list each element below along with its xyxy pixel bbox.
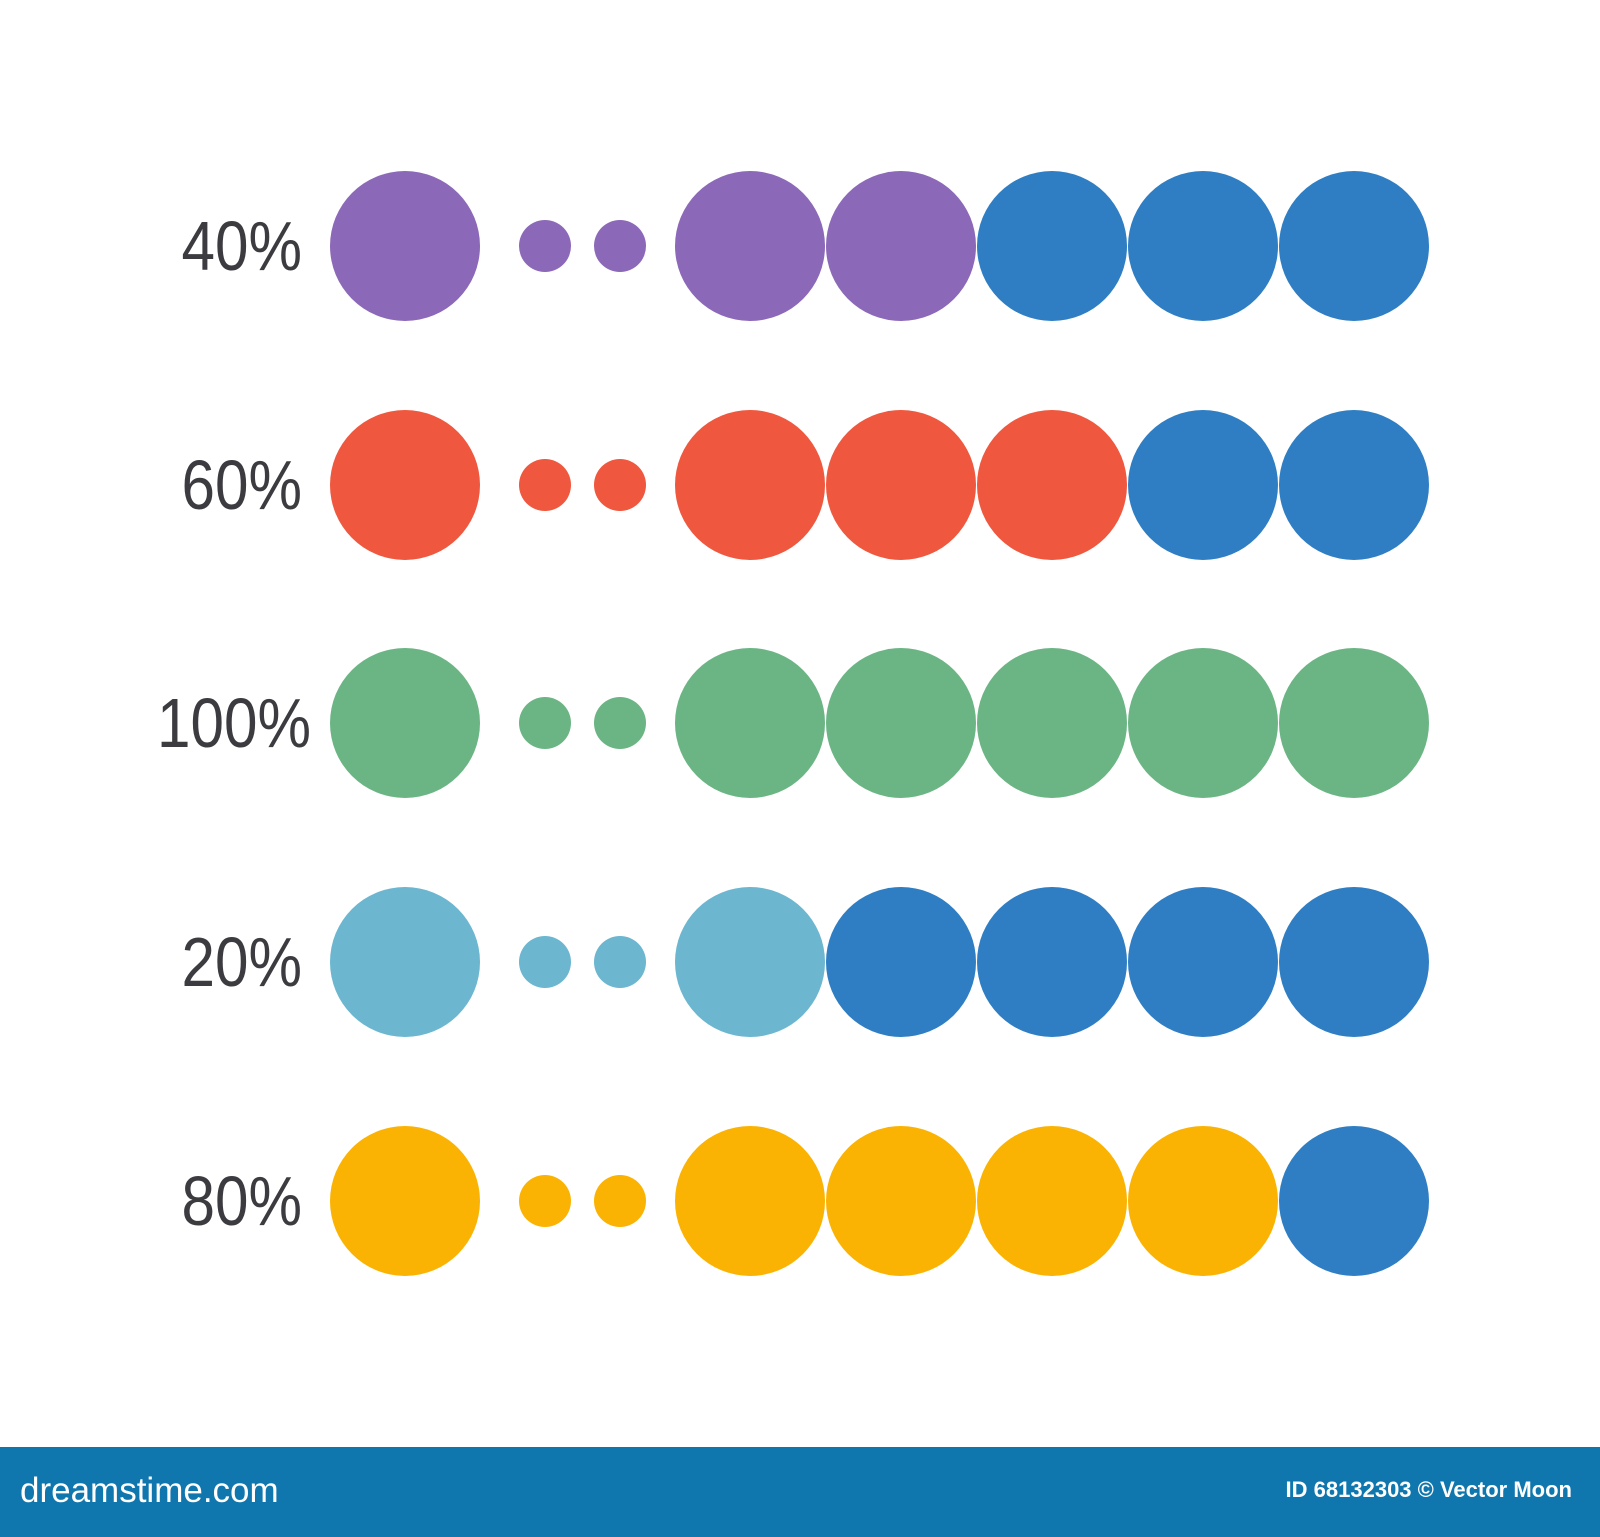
row 80% [330, 1126, 1429, 1276]
label 40%: 40% [182, 207, 302, 285]
row 20% [330, 887, 1429, 1037]
label 100%: 100% [157, 684, 311, 762]
footer bar [0, 1447, 1600, 1537]
row 40% [330, 171, 1429, 321]
label 80%: 80% [182, 1162, 302, 1240]
footer logo text: dreamstime.com [20, 1471, 279, 1510]
footer credit text: ID 68132303 © Vector Moon [1286, 1477, 1572, 1502]
row 100% [330, 648, 1429, 798]
label 20%: 20% [182, 923, 302, 1001]
label 60%: 60% [182, 446, 302, 524]
row 60% [330, 410, 1429, 560]
